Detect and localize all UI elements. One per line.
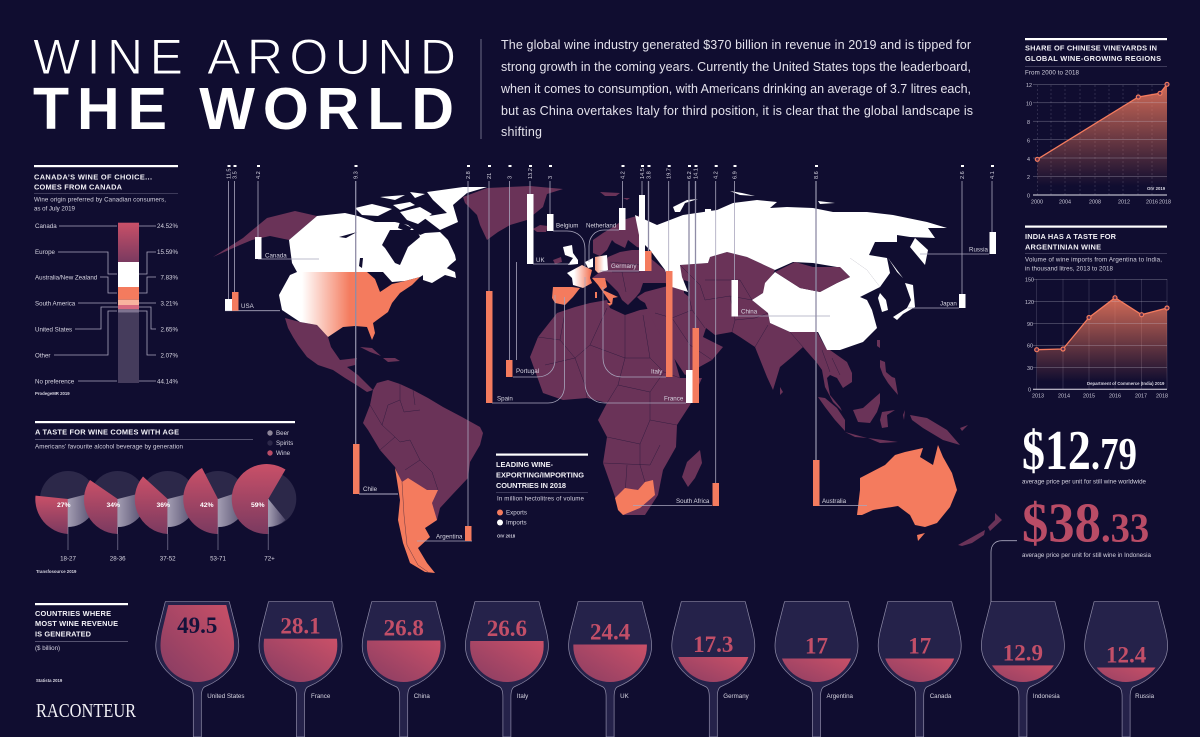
line chart: 2014: [1058, 394, 1070, 400]
panel subtitle: Americans’ favourite alcohol beverage by generation: [35, 444, 184, 450]
italy: [592, 278, 618, 306]
glass: indonesia: 12.9: [1003, 641, 1043, 666]
glass: uk: 24.4: [590, 620, 631, 644]
line chart: 10: [1026, 102, 1032, 108]
italy bar: Italy: [651, 368, 663, 376]
line chart: 2018: [1159, 200, 1171, 206]
canada bar: 4.2: [256, 171, 262, 179]
eastern europe: [592, 250, 672, 305]
stacked bar: [118, 223, 139, 383]
scandinavia: [593, 215, 641, 256]
panel: india argentinian wine chart: [1025, 226, 1169, 400]
pie 28-36: 28-36: [110, 556, 126, 562]
stacked bar labels: 44.14%: [157, 378, 178, 386]
stacked bar labels: 2.65%: [160, 326, 178, 334]
source: Transfosource 2019: [36, 569, 77, 574]
line chart: 2000: [1031, 200, 1043, 206]
japan bar: Japan: [940, 300, 957, 308]
line chart: 150: [1025, 278, 1034, 284]
stat: worldwide price: $12.79: [1022, 420, 1137, 482]
source: Statista 2019: [36, 678, 63, 683]
glass: united states: [156, 602, 244, 737]
glass: canada: [878, 602, 961, 737]
stacked bar labels: Australia/New Zealand: [35, 274, 98, 282]
germany: [595, 255, 608, 273]
china bar: 6.9: [732, 171, 738, 179]
glass: germany: 17.3: [693, 632, 733, 657]
korea: [878, 293, 888, 312]
line chart: [1025, 278, 1169, 400]
belgium bar: [547, 165, 585, 268]
line chart: Department of Commerce (India) 2019: [1087, 381, 1165, 386]
intro text: shifting: [501, 125, 542, 139]
title: THE WORLD: [33, 76, 454, 142]
asia: [610, 252, 852, 411]
panel subtitle: From 2000 to 2018: [1025, 70, 1080, 76]
pie 18-27: [35, 471, 96, 562]
line chart: 0: [1027, 194, 1030, 200]
germany bars: 3.8: [646, 171, 652, 179]
panel heading: INDIA HAS A TASTE FOR: [1025, 232, 1117, 241]
line chart: 2013: [1032, 394, 1044, 400]
glass: canada: 17: [908, 634, 931, 658]
legend heading: EXPORTING/IMPORTING: [496, 470, 584, 480]
australia bar: [813, 165, 867, 506]
pie 53-71: 53-71: [210, 556, 226, 562]
panel: wine revenue heading: [35, 603, 128, 683]
panel heading: ARGENTINIAN WINE: [1025, 242, 1101, 252]
germany bars: 14.5: [640, 168, 646, 179]
madagascar: [682, 450, 702, 487]
italy bar: [603, 165, 673, 377]
line chart: 2016: [1109, 394, 1121, 400]
line chart: OIV 2019: [1147, 186, 1166, 191]
germany bars: [600, 165, 652, 271]
glass: china: [362, 602, 445, 737]
pie 72+: 59%: [251, 502, 265, 509]
glass: united states: 49.5: [177, 613, 217, 638]
pie 53-71: 42%: [200, 502, 214, 509]
pie 28-36: 34%: [106, 502, 120, 509]
australia bar: 8.6: [814, 171, 820, 179]
subtitle: ($ billion): [35, 645, 60, 652]
legend: [267, 430, 293, 457]
panel heading: CANADA’S WINE OF CHOICE...: [34, 172, 152, 182]
usa bars: USA: [241, 303, 255, 310]
greenland: [463, 186, 563, 240]
france bars: France: [664, 396, 684, 402]
line chart: 2018: [1156, 394, 1168, 400]
uk bar: [527, 165, 570, 264]
panel: canada wine of choice: [34, 165, 178, 396]
russia: [635, 200, 947, 292]
stacked bar labels: Europe: [35, 249, 56, 256]
pie 53-71: [183, 468, 246, 562]
pie 72+: [232, 464, 296, 562]
legend exports: Exports: [506, 510, 527, 516]
heading: COUNTRIES WHERE: [35, 609, 111, 618]
panel heading: COMES FROM CANADA: [34, 182, 123, 192]
chile bar: [353, 165, 398, 494]
argentina bar: [417, 165, 472, 541]
line chart: 2012: [1118, 200, 1130, 206]
france bars: 14.1: [694, 168, 700, 179]
pie 37-52: 37-52: [160, 556, 176, 562]
portugal bar: 3: [508, 176, 514, 179]
belgium bar: 3: [548, 176, 554, 179]
line chart: 60: [1027, 344, 1033, 350]
panel heading: SHARE OF CHINESE VINEYARDS IN: [1025, 44, 1157, 52]
stacked bar labels: United States: [35, 326, 72, 334]
panel heading: A TASTE FOR WINE COMES WITH AGE: [35, 428, 179, 436]
glass: uk: [569, 602, 652, 737]
line chart: [1026, 82, 1171, 206]
south america: [363, 380, 483, 528]
glass: indonesia: [981, 602, 1064, 737]
south africa bar: [633, 165, 720, 506]
new zealand: [958, 513, 1002, 546]
netherlands bar: 4.2: [620, 171, 626, 179]
legend heading: LEADING WINE-: [496, 460, 554, 469]
glass: argentina: Argentina: [826, 693, 854, 700]
glass: russia: Russia: [1135, 693, 1155, 700]
argentina bar: 2.8: [466, 171, 472, 179]
legend: Spirits: [276, 440, 293, 447]
stacked bar labels: [35, 223, 178, 386]
spain bar: Spain: [497, 396, 513, 402]
glass: russia: 12.4: [1106, 642, 1147, 667]
mexico and central america: [285, 318, 373, 392]
stat: worldwide price: average price per unit for still wine worldwide: [1022, 478, 1147, 486]
russia bar: 4.1: [990, 171, 996, 179]
france bars: 6.2: [687, 171, 693, 179]
canada bar: [255, 165, 319, 260]
pie 18-27: 18-27: [60, 556, 76, 562]
africa: [530, 300, 702, 515]
panel: map legend: [496, 454, 588, 538]
canadian arctic islands: [355, 187, 487, 283]
line chart: 120: [1025, 300, 1034, 306]
belgium bar: Belgium: [556, 222, 578, 230]
legend heading: COUNTRIES IN 2018: [496, 481, 566, 490]
line chart: 0: [1028, 388, 1031, 394]
south-east asian islands: [780, 340, 968, 445]
italy bar: 19.7: [667, 168, 673, 179]
intro text: when it comes to consumption, with Americans drinking an average of 3.7 litres each,: [500, 82, 971, 96]
japan bar: 2.6: [960, 171, 966, 179]
title: [33, 29, 456, 142]
glass: france: France: [311, 693, 331, 700]
uk bar: 13.2: [528, 168, 534, 179]
legend: Beer: [276, 430, 289, 437]
japan bar: [908, 165, 966, 308]
canada bar: Canada: [265, 252, 287, 260]
stacked bar labels: No preference: [35, 378, 75, 386]
iceland: [533, 225, 548, 232]
ireland: [553, 257, 562, 264]
panel subtitle: in thousand litres, 2013 to 2018: [1025, 266, 1114, 272]
panel subtitle: Wine origin preferred by Canadian consumers,: [34, 196, 166, 204]
france bars: [585, 165, 700, 403]
line chart: 6: [1027, 138, 1030, 144]
usa: [279, 272, 420, 340]
argentina bar: Argentina: [436, 534, 463, 540]
glasses chart: [156, 602, 1168, 737]
stacked bar labels: 2.07%: [160, 352, 178, 360]
hudson bay and lakes: [339, 222, 420, 292]
canada: [289, 213, 456, 282]
title: WINE AROUND: [33, 29, 456, 85]
glass: france: 28.1: [280, 614, 321, 638]
intro text: [481, 38, 973, 139]
china bar: China: [741, 308, 758, 316]
spain bar: 21: [487, 173, 493, 179]
glass: germany: [672, 602, 755, 737]
panel subtitle: Volume of wine imports from Argentina to India,: [1025, 256, 1162, 264]
france: [567, 265, 592, 288]
glass: china: China: [414, 693, 430, 700]
china bar: [732, 165, 830, 316]
glass: canada: Canada: [930, 693, 952, 700]
stat: indonesia price: $38.33: [1022, 492, 1149, 554]
heading: MOST WINE REVENUE: [35, 619, 118, 628]
heading: IS GENERATED: [35, 630, 92, 638]
south africa: [615, 480, 655, 515]
usa bars: 3.5: [232, 171, 238, 179]
country bars and leaders: [225, 165, 996, 541]
spain bar: [486, 165, 564, 403]
glass: argentina: [775, 602, 858, 737]
svalbard: [600, 192, 630, 200]
australia: [857, 445, 957, 541]
chile bar: 9.3: [354, 171, 360, 179]
glass: italy: Italy: [517, 693, 529, 700]
japan: [893, 283, 915, 320]
intro text: but as China overtakes Italy for third position, it is clear that the global landscape is: [501, 104, 973, 118]
pie 72+: 72+: [264, 556, 275, 562]
source: OIV 2018: [497, 534, 516, 538]
australia bar: Australia: [822, 498, 847, 505]
stacked bar labels: South America: [35, 300, 76, 308]
line chart: 30: [1027, 366, 1033, 372]
chile bar: Chile: [363, 486, 378, 493]
legend subtitle: In million hectolitres of volume: [497, 496, 585, 502]
glass: italy: [465, 602, 548, 737]
line chart: 2015: [1083, 394, 1095, 400]
mongolia: [775, 262, 850, 292]
usa bars: [225, 165, 280, 311]
china: [752, 258, 880, 350]
intro text: The global wine industry generated $370 billion in revenue in 2019 and is tipped for: [501, 38, 971, 52]
source: ProdegeMR 2019: [35, 391, 70, 396]
line chart: 90: [1027, 322, 1033, 328]
uk: [563, 245, 578, 265]
russia bar: [920, 165, 996, 254]
stacked bar labels: 24.52%: [157, 223, 178, 230]
line chart: 8: [1027, 120, 1030, 126]
pie 28-36: [84, 471, 146, 562]
alaska: [213, 211, 317, 257]
stacked bar labels: 15.59%: [157, 249, 178, 256]
glass: italy: 26.6: [487, 616, 527, 641]
glass: germany: Germany: [723, 693, 750, 700]
uk bar: UK: [536, 257, 545, 264]
logo: raconteur: RACONTEUR: [36, 700, 137, 721]
benelux: [585, 258, 593, 268]
spain and portugal: [552, 287, 580, 305]
glass: russia: [1085, 602, 1168, 737]
south africa bar: 4.2: [714, 171, 720, 179]
stacked bar labels: 3.21%: [160, 300, 178, 308]
glass: china: 26.8: [384, 616, 424, 640]
world map: [213, 186, 1002, 573]
glass: argentina: 17: [805, 634, 828, 658]
stat: indonesia price: average price per unit for still wine in Indonesia: [1022, 552, 1152, 559]
panel subtitle: as of July 2019: [34, 206, 76, 212]
stacked bar leaders: [54, 226, 156, 381]
glass: uk: UK: [620, 693, 630, 700]
line chart: 4: [1027, 157, 1030, 163]
panel: taste for wine comes with age: [35, 421, 296, 574]
line chart: 2016: [1146, 200, 1158, 206]
glass: france: [259, 602, 342, 737]
russian arctic islands: [673, 191, 928, 278]
argentina and chile: [395, 468, 438, 573]
line chart: 2008: [1089, 200, 1101, 206]
caribbean: [360, 347, 400, 362]
line chart: 12: [1026, 83, 1032, 89]
stacked bar labels: Canada: [35, 223, 57, 230]
germany bars: Germany: [611, 263, 637, 270]
intro text: strong growth in the coming years. Currently the United States tops the leaderboard,: [501, 60, 971, 74]
portugal bar: Portugal: [516, 368, 539, 375]
pie 37-52: 36%: [156, 502, 170, 509]
south africa bar: South Africa: [676, 498, 710, 505]
stacked bar labels: Other: [35, 352, 50, 360]
legend imports: Imports: [506, 520, 527, 526]
legend: Wine: [276, 450, 291, 457]
arrow: indonesia leader: [991, 541, 1017, 602]
russia bar: Russia: [969, 246, 988, 254]
panel heading: GLOBAL WINE-GROWING REGIONS: [1025, 54, 1161, 63]
line chart: 2004: [1059, 200, 1071, 206]
pie 37-52: [135, 471, 196, 562]
line chart: 2017: [1135, 394, 1147, 400]
glass: united states: United States: [207, 693, 244, 700]
netherlands bar: [586, 165, 626, 262]
netherlands bar: Netherland: [586, 222, 617, 230]
stacked bar labels: 7.83%: [160, 274, 178, 282]
pie 18-27: 27%: [57, 502, 71, 509]
usa bars: 11.5: [226, 169, 232, 179]
panel: chinese vineyards chart: [1025, 38, 1171, 206]
portugal bar: [506, 165, 555, 377]
glass: indonesia: Indonesia: [1033, 693, 1060, 700]
line chart: 2: [1027, 175, 1030, 181]
